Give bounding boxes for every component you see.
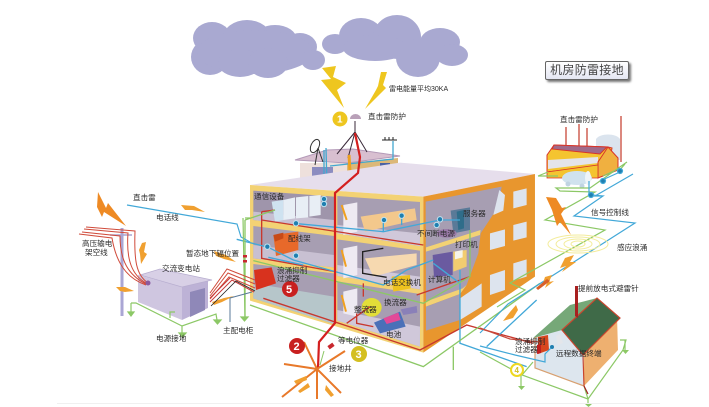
battery xyxy=(374,312,406,333)
labels: 计算机 xyxy=(428,274,451,284)
labels: 等电位器 xyxy=(338,335,369,345)
rooftop house xyxy=(295,121,400,187)
labels: 配线架 xyxy=(288,233,311,243)
labels: 接地井 xyxy=(329,363,352,373)
labels: 不间断电源 xyxy=(417,228,455,238)
labels: 过滤器 xyxy=(515,344,538,354)
marker 4 xyxy=(511,364,523,376)
remote data house xyxy=(533,286,620,386)
right green ground line xyxy=(497,162,627,307)
labels: 远程数据终端 xyxy=(556,348,602,358)
equipotential device xyxy=(320,343,335,365)
labels: 直击雷 xyxy=(133,192,156,202)
labels: 浪涌抑制 xyxy=(277,265,308,275)
labels: 暂态地下辐位置 xyxy=(186,248,240,258)
marker 3 xyxy=(351,346,367,362)
right bolt xyxy=(546,197,571,235)
computer and printer xyxy=(433,250,467,277)
marker 1: 1 xyxy=(337,114,343,126)
distribution frame xyxy=(273,232,298,256)
labels: 直击雷防护 xyxy=(560,114,598,124)
marker 2 xyxy=(289,338,305,354)
marker 4: 4 xyxy=(514,366,520,375)
marker 5: 5 xyxy=(286,284,292,296)
labels: 提前放电式避雷针 xyxy=(578,283,639,293)
small surge sparks xyxy=(116,205,236,305)
orange side wall xyxy=(423,174,535,353)
labels: 雷电能量平均30KA xyxy=(389,84,448,93)
labels: 过滤器 xyxy=(277,273,300,283)
house wiring xyxy=(480,328,629,407)
UPS xyxy=(437,229,457,238)
labels: 通信设备 xyxy=(254,191,285,201)
inverter xyxy=(401,306,417,315)
marker 1 xyxy=(332,112,348,126)
power pole and overhead lines xyxy=(79,227,150,316)
labels: 电话线 xyxy=(156,212,179,222)
labels: 电池 xyxy=(386,329,402,339)
lightning rod dome xyxy=(350,114,361,119)
labels: 服务器 xyxy=(463,208,486,218)
labels: 架空线 xyxy=(85,247,108,257)
labels: 感应浪涌 xyxy=(617,242,647,252)
blue signal wiring xyxy=(237,217,537,367)
labels: 直击雷防护 xyxy=(368,111,406,121)
labels: 打印机 xyxy=(455,239,478,249)
ground sparks xyxy=(294,376,334,397)
windows xyxy=(460,188,527,320)
comms racks xyxy=(272,195,321,222)
labels: 主配电柜 xyxy=(223,325,254,335)
telephone line xyxy=(127,205,250,242)
red earth wiring xyxy=(262,210,533,350)
main distribution feed lines xyxy=(210,269,255,322)
lightning bolts from clouds xyxy=(321,66,387,109)
transient position marker xyxy=(243,255,247,262)
green station ground xyxy=(128,218,250,337)
labels: 信号控制线 xyxy=(591,207,629,217)
surge filter box xyxy=(254,267,276,290)
substation xyxy=(138,269,212,320)
bottom rule xyxy=(57,402,660,404)
labels: 电话交换机 xyxy=(383,277,421,287)
marker 3: 3 xyxy=(356,349,362,361)
roof xyxy=(250,163,535,197)
clouds xyxy=(191,15,468,78)
marker 5 xyxy=(282,281,298,297)
title: 机房防雷接地 xyxy=(550,63,624,77)
induced surge rings xyxy=(548,235,608,253)
oil tank xyxy=(562,171,592,188)
cutaway rooms xyxy=(253,187,505,347)
junction dots xyxy=(265,196,443,258)
labels: 交流变电站 xyxy=(162,263,200,273)
factory xyxy=(547,116,621,178)
building xyxy=(237,163,540,370)
server xyxy=(451,207,470,233)
green ground wiring xyxy=(245,210,540,370)
labels: 高压输电 xyxy=(82,238,113,248)
ground well xyxy=(282,342,345,399)
labels: 浪涌抑制 xyxy=(515,336,546,346)
title xyxy=(545,61,629,80)
labels: 整流器 xyxy=(354,304,377,314)
main down conductor xyxy=(318,133,360,368)
surge sparks near house xyxy=(503,255,576,321)
overhead bolt xyxy=(97,192,126,226)
room doors and desks xyxy=(342,202,417,317)
labels: 电源接地 xyxy=(156,333,187,343)
labels xyxy=(82,84,647,373)
labels: 换流器 xyxy=(384,297,407,307)
right blue signal line xyxy=(480,168,635,333)
telephone exchange xyxy=(392,275,411,292)
marker 2: 2 xyxy=(294,341,300,353)
rectifier xyxy=(362,298,382,317)
front wall frame xyxy=(250,185,423,353)
